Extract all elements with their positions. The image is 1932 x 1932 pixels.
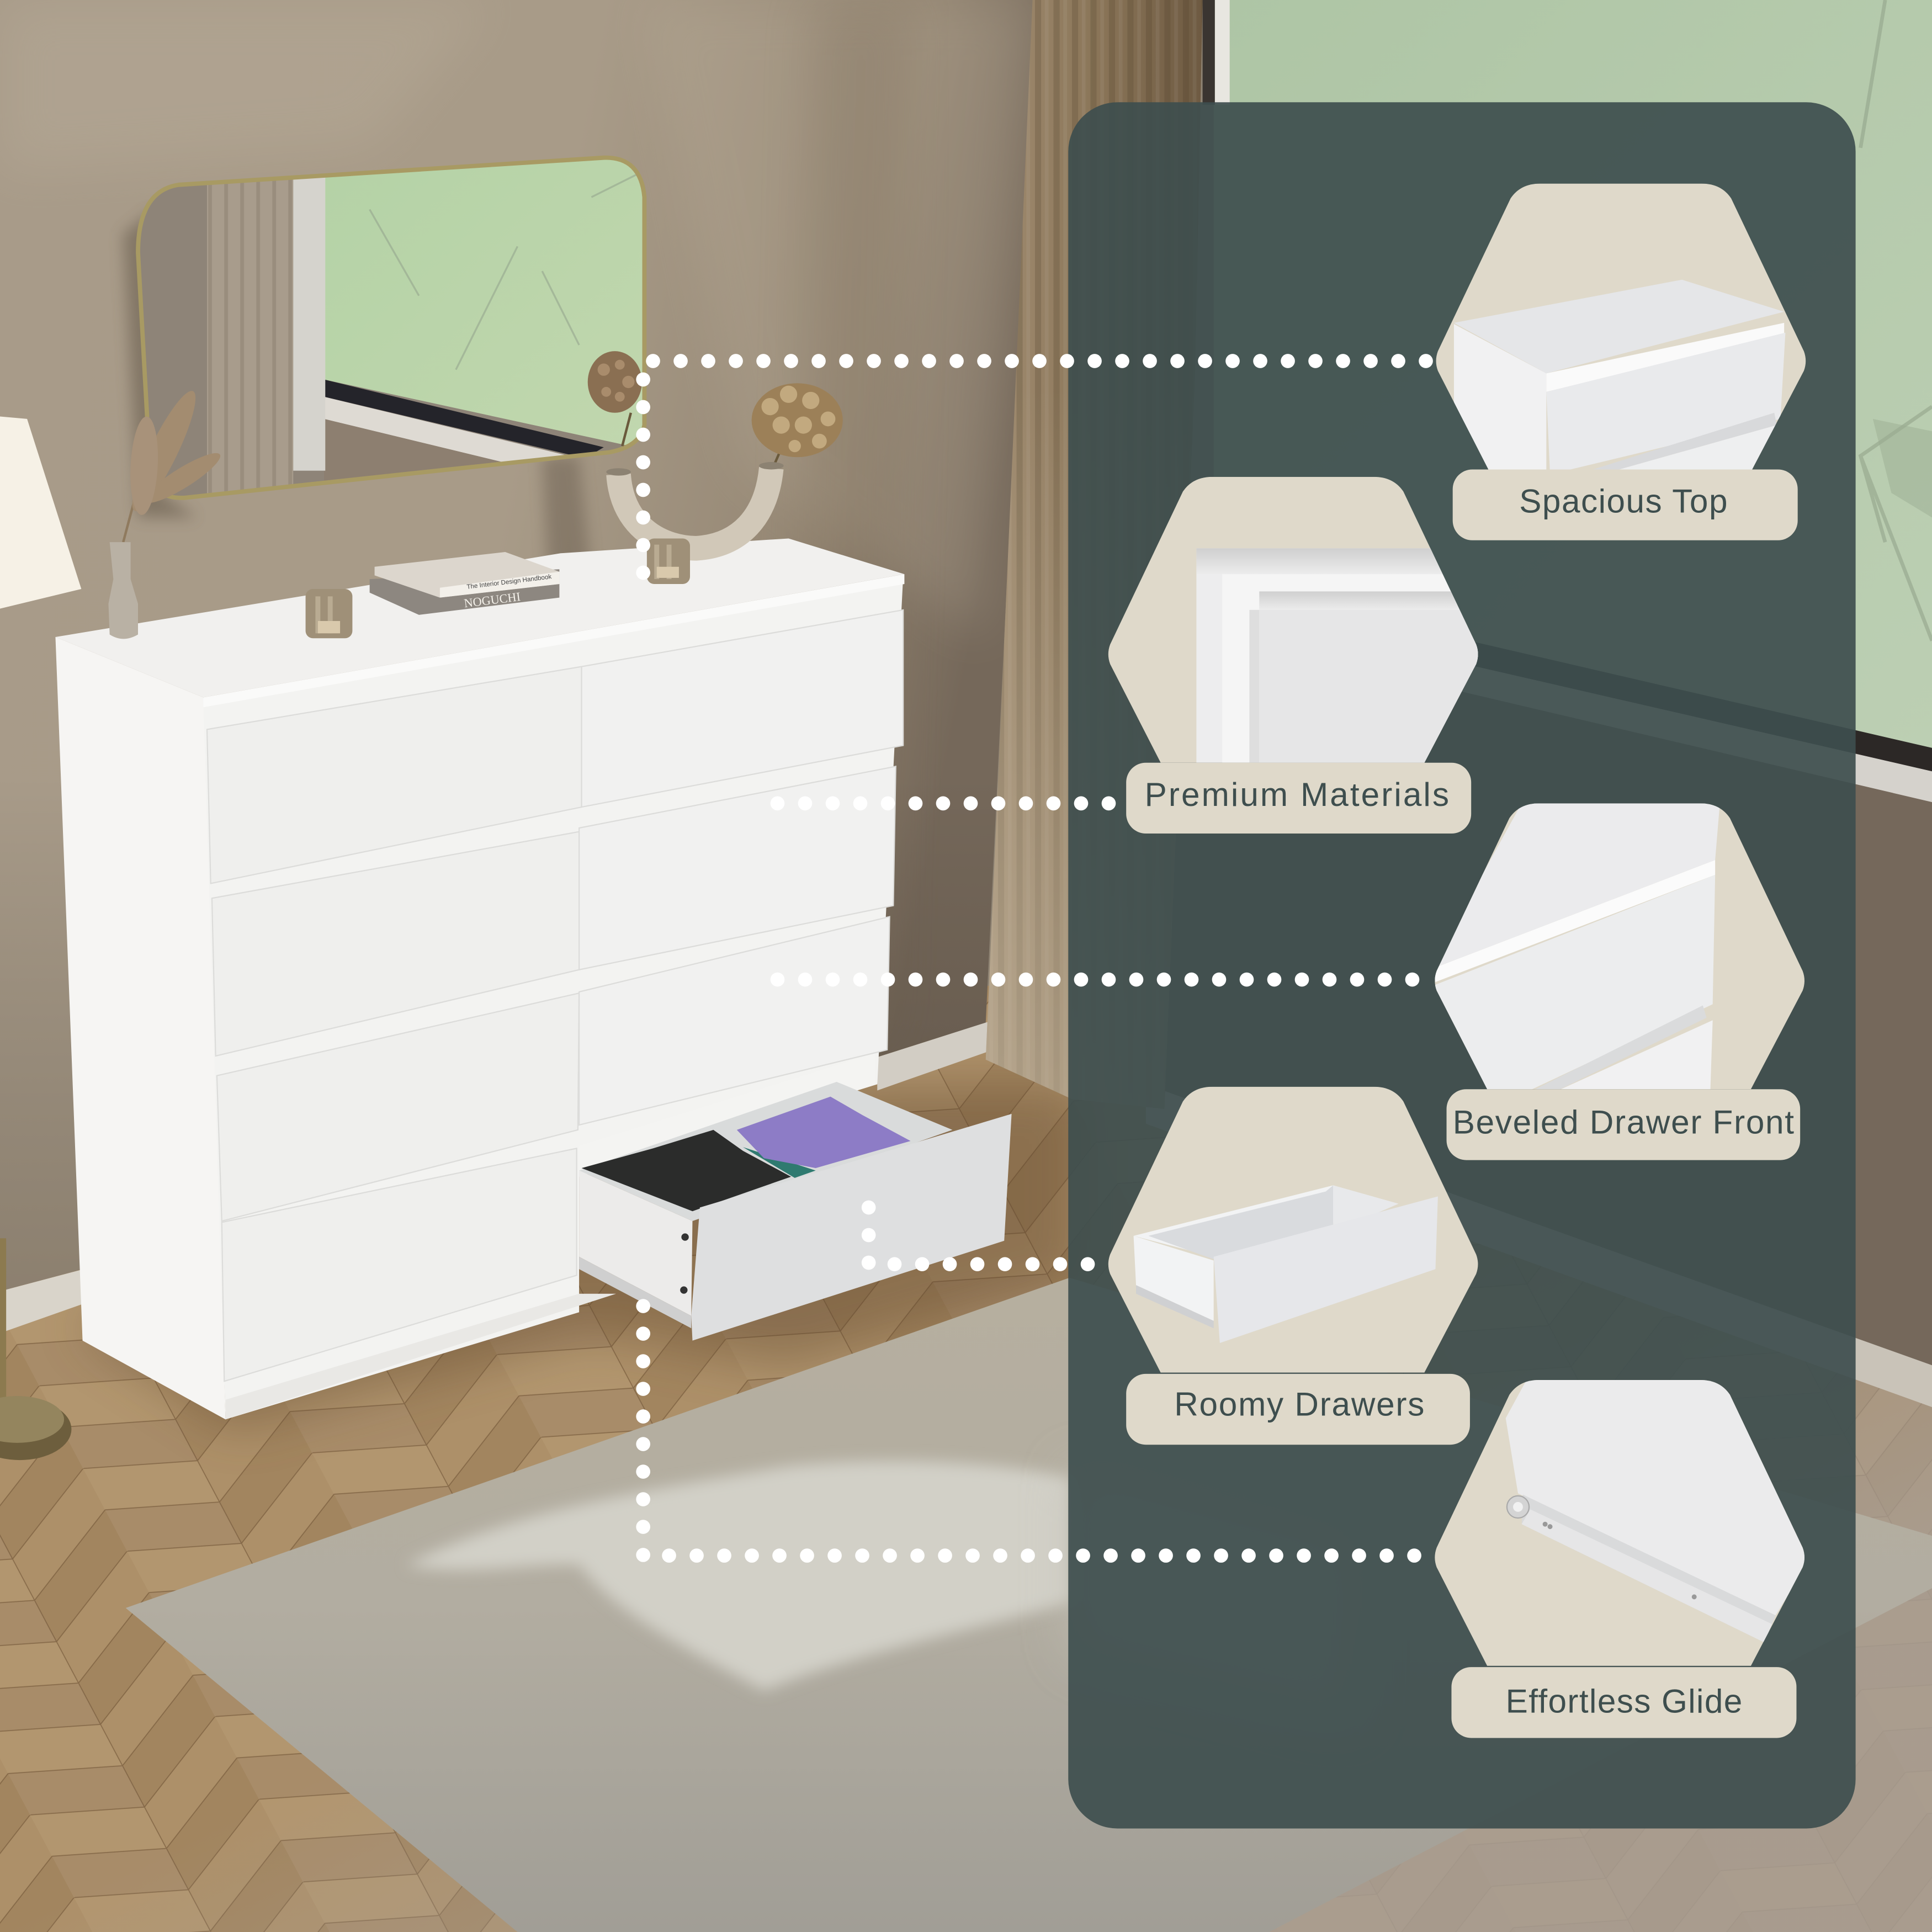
label [1453, 469, 1798, 540]
decor: U vase with dried hydrangea [606, 383, 843, 548]
dresser front recess [203, 577, 903, 1419]
drawer front [691, 1114, 1012, 1341]
clothes: teal [743, 1147, 816, 1178]
label: Roomy Drawers [1174, 1386, 1424, 1423]
window view [1214, 0, 1932, 754]
label [1126, 763, 1471, 834]
hexagon image [1429, 801, 1811, 1094]
label [1126, 1374, 1470, 1445]
hexagon image [1429, 179, 1811, 474]
dresser [55, 538, 1012, 1419]
feature: effortless glide [1429, 1378, 1811, 1738]
decor: slim vase with pampas [108, 385, 225, 639]
label: Beveled Drawer Front [1453, 1103, 1794, 1141]
connector: premium materials [777, 800, 1115, 806]
rug [126, 1278, 1932, 1932]
lamp [0, 416, 81, 1460]
hexagon image [1103, 1084, 1485, 1378]
label: Spacious Top [1519, 482, 1727, 520]
label: Effortless Glide [1506, 1682, 1742, 1720]
connector: beveled drawer front [777, 976, 1417, 983]
panel: features background [1068, 102, 1856, 1829]
right baseboard [1146, 1084, 1932, 1407]
baseboards [0, 1020, 993, 1333]
decor: left candle [306, 589, 352, 638]
decor: books [370, 552, 559, 615]
hexagon image [1103, 474, 1487, 771]
left drawers [207, 667, 582, 1381]
decor: books: The Interior Design Handbook [466, 573, 552, 591]
connector: roomy drawers [869, 1208, 1092, 1265]
hexagon image [1429, 1378, 1811, 1671]
drawer interior [579, 1082, 952, 1221]
dresser side [55, 637, 225, 1419]
connector: effortless glide [643, 1306, 1419, 1556]
slide wheel [1507, 1496, 1697, 1599]
feature: premium materials [1103, 474, 1487, 834]
connector: spacious top [643, 361, 1429, 577]
right drawers [579, 610, 903, 1125]
left wall [0, 0, 1035, 1291]
decor: right candle [647, 538, 690, 584]
dresser top [55, 538, 904, 697]
drawer cavity [579, 1053, 875, 1177]
right wall [1146, 589, 1932, 1368]
drawer side [579, 1171, 692, 1316]
feature: beveled drawer front [1429, 801, 1811, 1160]
label: Premium Materials [1145, 776, 1449, 813]
drawer rail [579, 1257, 691, 1328]
mirror [136, 154, 653, 505]
open drawer [579, 1053, 1012, 1341]
label [1447, 1089, 1800, 1160]
curtain [986, 0, 1203, 1109]
decor: books: NOGUCHI [463, 590, 521, 610]
feature: spacious top [1429, 179, 1811, 540]
clothes: black [582, 1130, 791, 1211]
feature: roomy drawers [1103, 1084, 1485, 1445]
window sill and frame [1203, 0, 1932, 802]
label [1451, 1667, 1796, 1738]
reflected hydrangea [588, 351, 642, 446]
clothes: purple [737, 1097, 911, 1168]
wood floor [0, 986, 1932, 1932]
dresser base [225, 1294, 616, 1419]
